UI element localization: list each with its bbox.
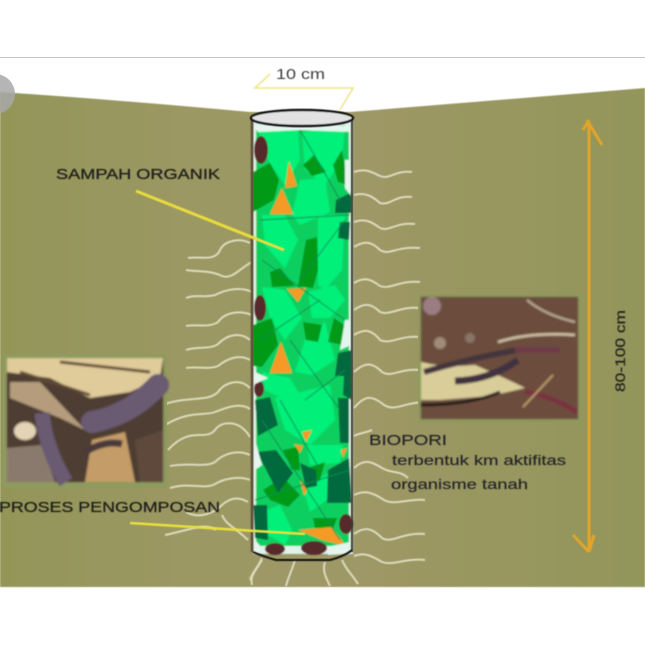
dimension arrow: 10 cm: [255, 74, 353, 110]
column: organic waste in the hole: [253, 118, 353, 555]
label: biopori: BIOPORI: [369, 432, 447, 449]
soil cross-section: [0, 88, 645, 587]
yellow pointer to compost: [130, 523, 305, 534]
yellow pointer to organic waste: [136, 191, 284, 250]
grey circle at left edge: [0, 74, 15, 114]
label: biopori: terbentuk km aktifitas: [392, 452, 566, 468]
column walls and rim: [252, 118, 352, 560]
photo: worms on soil: [418, 294, 581, 423]
leaf vein lines: [255, 130, 350, 540]
depth arrow: [573, 120, 602, 552]
label: biopori: organisme tanah: [391, 476, 528, 492]
label: proses pengomposan: PROSES PENGOMPOSAN: [0, 499, 220, 516]
photo: worm in dry leaves: [3, 354, 167, 488]
leaf: deep green: [253, 192, 352, 540]
hole opening ellipse: [251, 110, 353, 126]
seepage lines: water flowing out of the hole: [165, 170, 425, 586]
decomposed material: brown clods: [254, 136, 353, 555]
label: sampah organik: SAMPAH ORGANIK: [56, 166, 220, 183]
label: 10 cm: 10 cm: [276, 66, 325, 83]
leaf: dark green: [253, 150, 348, 529]
label: biopori: [369, 432, 566, 492]
label: 80-100 cm: 80-100 cm: [612, 310, 628, 392]
white gaps between leaves: [253, 124, 352, 555]
leaf: light green: [258, 125, 345, 545]
leaf: orange: [270, 161, 347, 546]
